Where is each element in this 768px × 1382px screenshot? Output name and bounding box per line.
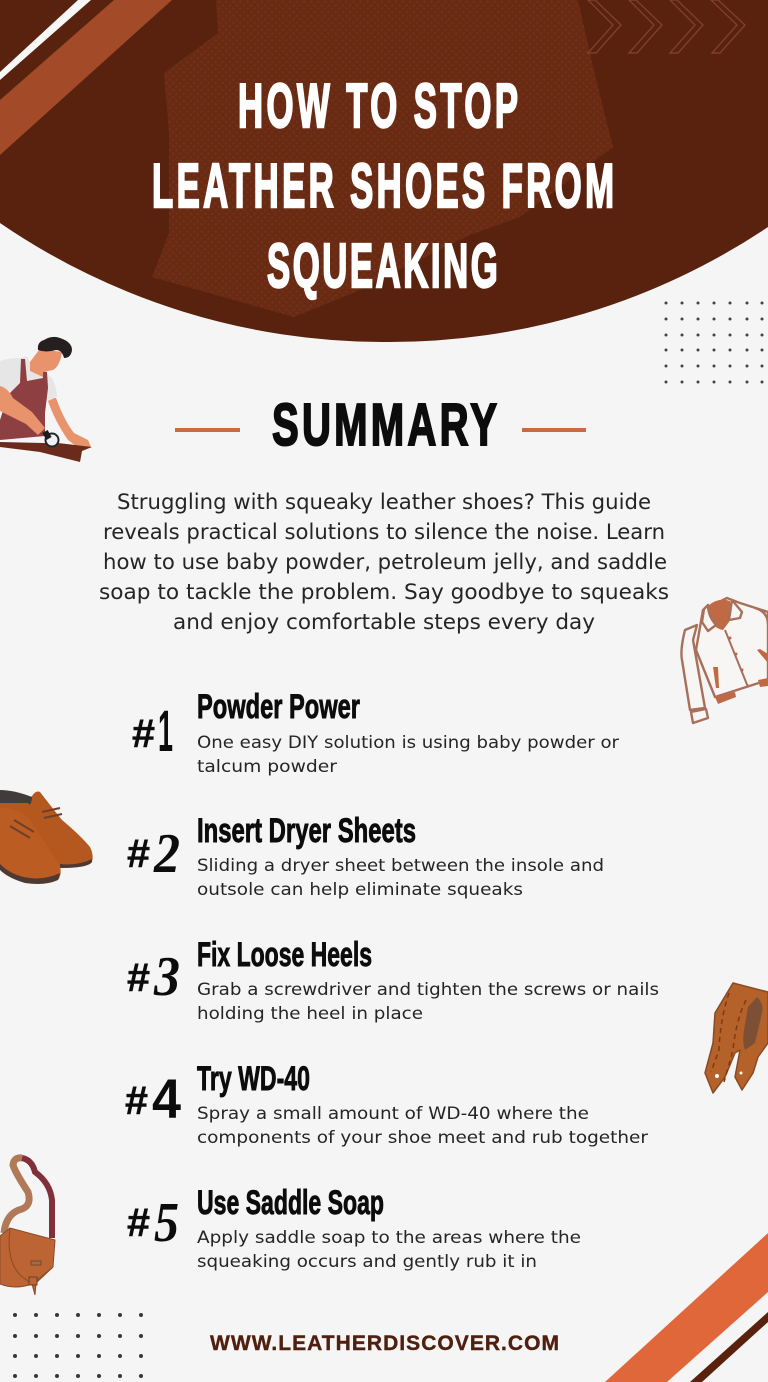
tip 2: # [127,832,150,876]
tip 2: Sliding a dryer sheet between the insole and [197,856,604,876]
header banner [0,0,768,345]
tip 1: # [132,712,155,756]
summary paragraph: Struggling with squeaky leather shoes? This guide [117,490,651,514]
tip 3: Fix Loose Heels [197,936,372,974]
summary paragraph: and enjoy comfortable steps every day [173,610,595,634]
tip 4 [125,1060,648,1148]
tip 4: components of your shoe meet and rub together [197,1128,648,1148]
right accent line [522,428,586,432]
orange diagonal stripe [605,1233,768,1382]
dot grid bottom left [13,1313,143,1378]
tip 2: outsole can help eliminate squeaks [197,880,523,900]
title: HOW TO STOP [238,71,518,141]
orange diagonal stripe [0,0,172,155]
website footer: WWW.LEATHERDISCOVER.COM [210,1332,559,1355]
tip 2: 2 [153,823,180,885]
tip 5: squeaking occurs and gently rub it in [197,1252,537,1272]
tip 5: Use Saddle Soap [197,1184,384,1222]
white diagonal stripe [0,0,91,80]
tip 5 [127,1184,581,1272]
tip 4: Try WD-40 [197,1060,310,1098]
summary paragraph: reveals practical solutions to silence the noise. Learn [103,520,665,544]
tip 1: talcum powder [197,757,337,777]
tip 1 [132,688,619,777]
left accent line [175,428,240,432]
tip 3 [127,936,659,1024]
corner stripes [605,1233,768,1382]
tip 5: 5 [154,1192,179,1254]
dark diagonal stripe [690,1312,768,1382]
tip 4: 4 [152,1067,181,1130]
tip 4: # [125,1079,148,1123]
tip 1: One easy DIY solution is using baby powder or [197,733,619,753]
tip 1: Powder Power [197,688,360,726]
tip 3: # [127,956,150,1000]
tip 4: Spray a small amount of WD-40 where the [197,1104,589,1124]
tip 3: 3 [153,946,180,1008]
summary heading [175,391,586,458]
list of tips [125,688,659,1272]
title: SQUEAKING [267,231,498,301]
summary paragraph [99,490,669,634]
icon: brown shoes [0,790,93,884]
chevron arrows [588,0,745,53]
icon: leather craftsman [0,337,92,462]
title [152,71,614,301]
summary text: SUMMARY [272,391,497,458]
tip 3: Grab a screwdriver and tighten the screws or nails [197,980,659,1000]
tip 2: Insert Dryer Sheets [197,812,416,850]
tip 2 [127,812,604,900]
icon: jacket [681,598,768,723]
icon: leather heel strap [705,983,768,1093]
tip 5: Apply saddle soap to the areas where the [197,1228,581,1248]
tip 3: holding the heel in place [197,1004,423,1024]
leather patch texture [152,0,613,317]
tip 1: 1 [158,699,173,764]
tip 5: # [127,1201,150,1245]
title: LEATHER SHOES FROM [152,151,614,221]
icon: shoulder bag [0,1158,55,1295]
summary paragraph: soap to tackle the problem. Say goodbye to squeaks [99,580,669,604]
summary paragraph: how to use baby powder, petroleum jelly, and saddle [103,550,667,574]
dot grid top right [664,302,764,384]
